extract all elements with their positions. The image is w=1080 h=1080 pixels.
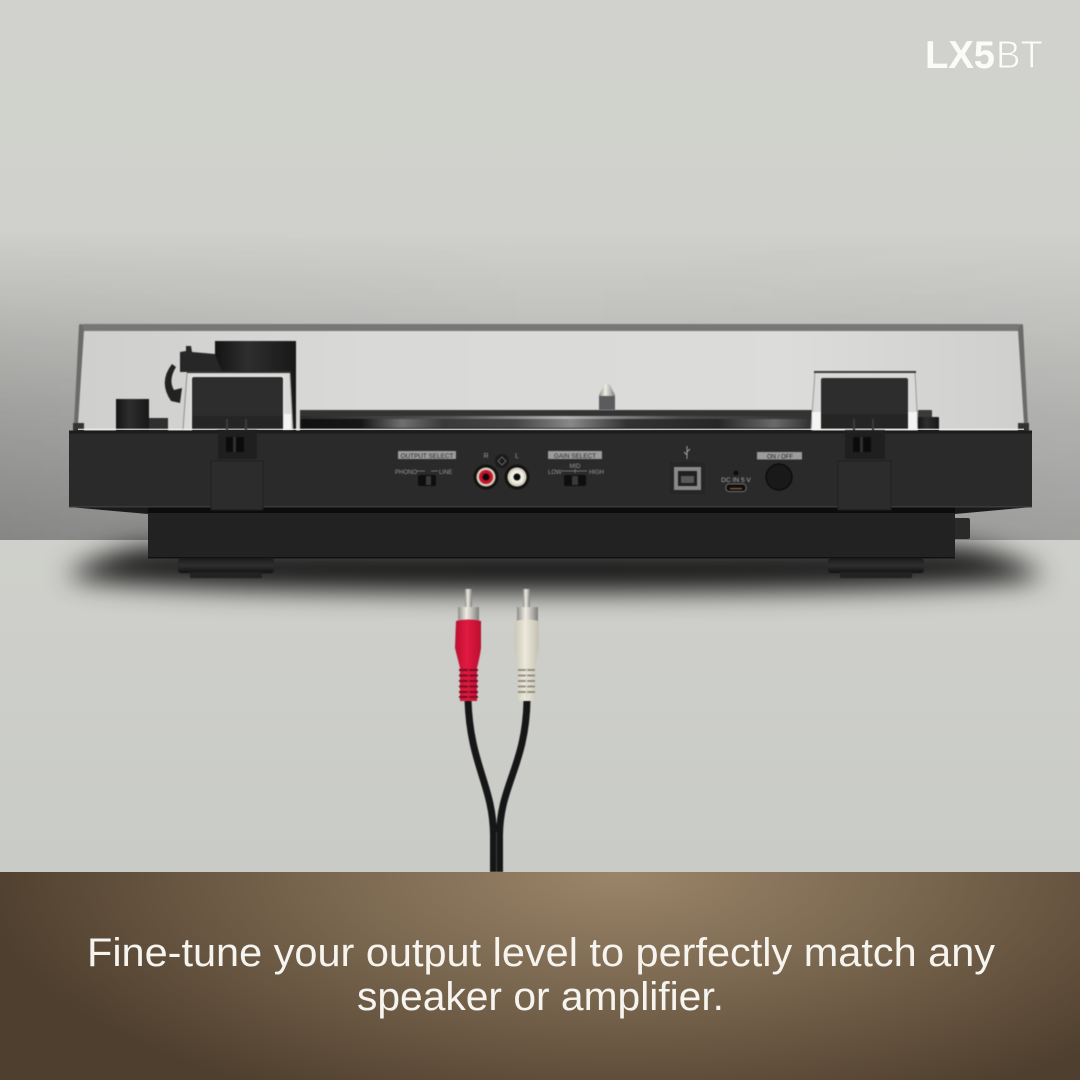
gain select switch: GAIN SELECT	[554, 453, 596, 460]
wall background	[0, 259, 1080, 540]
power button: ON / OFF	[767, 454, 793, 460]
turntable shadow on floor	[66, 546, 1044, 592]
gain select switch	[548, 451, 604, 486]
foot right	[828, 558, 924, 578]
RCA output sockets: L	[515, 453, 519, 460]
USB-B port	[669, 446, 706, 495]
DC IN 5 V port: DC IN 5 V	[721, 477, 751, 484]
output select switch: OUTPUT SELECT	[401, 453, 453, 460]
gain select switch: LOW	[548, 470, 562, 476]
caption band	[0, 872, 1080, 1080]
dust cover	[73, 324, 1029, 433]
foot left	[178, 558, 274, 578]
right hinge latch	[838, 419, 891, 510]
red plug	[455, 589, 481, 701]
caption text	[87, 931, 995, 1019]
RCA cable	[455, 589, 539, 872]
right clear hinge housing	[811, 371, 978, 434]
DC IN 5 V port	[721, 471, 751, 492]
platter and record	[300, 410, 812, 434]
output select switch	[395, 451, 456, 486]
LX5BT logo	[925, 34, 1043, 77]
LX5BT logo: LX5	[925, 34, 995, 77]
turntable	[69, 324, 1032, 578]
tonearm assembly	[116, 341, 296, 433]
RCA output sockets: R	[483, 453, 489, 460]
RCA output sockets	[474, 453, 530, 490]
gain select switch: MID	[570, 464, 581, 470]
floor surface	[0, 540, 1080, 873]
lid base highlight	[78, 429, 1024, 430]
cable wires	[468, 700, 527, 872]
left clear hinge housing	[183, 371, 293, 431]
output select switch: LINE	[439, 470, 452, 476]
caption text: Fine-tune your output level to perfectly match any	[87, 931, 995, 975]
main chassis	[69, 430, 1032, 514]
LX5BT logo: BT	[996, 34, 1043, 77]
white plug	[514, 589, 539, 701]
lower base	[148, 506, 955, 558]
output select switch: PHONO	[395, 470, 417, 476]
caption text: speaker or amplifier.	[357, 975, 724, 1019]
rear knob on base	[950, 518, 970, 539]
spindle	[599, 384, 615, 410]
left hinge latch	[211, 419, 263, 510]
power button	[757, 452, 802, 490]
gain select switch: HIGH	[589, 470, 604, 476]
